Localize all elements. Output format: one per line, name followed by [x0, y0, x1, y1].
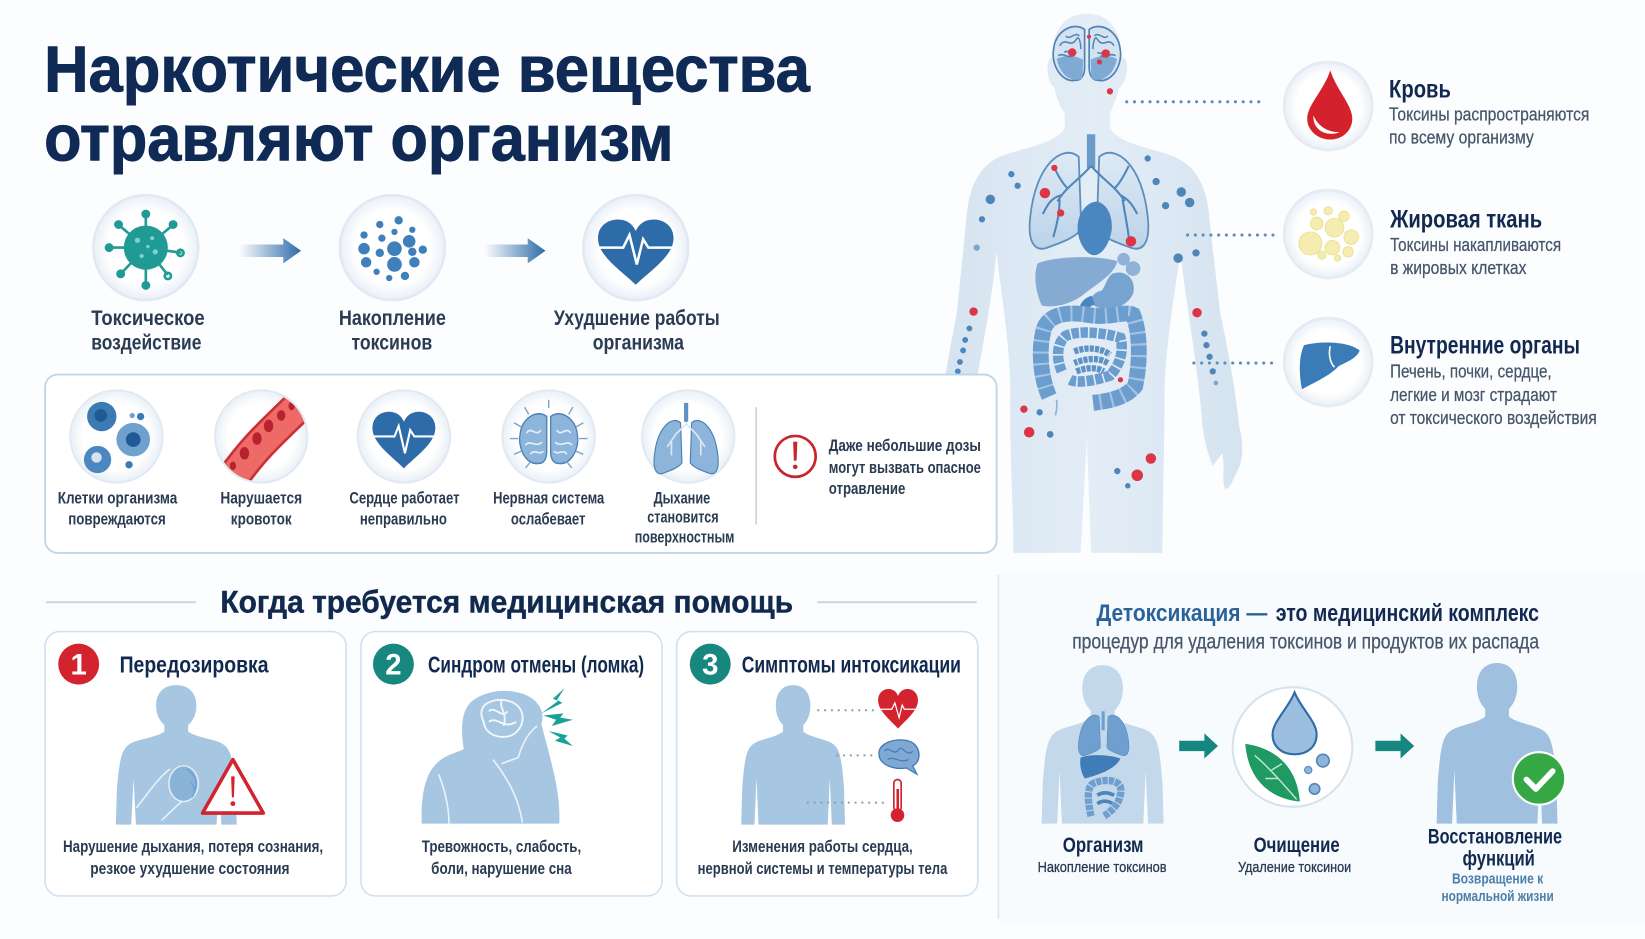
brain outline — [481, 700, 523, 737]
label: Клетки организма — [58, 490, 178, 508]
item: blood flow — [215, 390, 307, 529]
warning text: Даже небольшие дозы — [829, 437, 981, 455]
description: от токсического воздействия — [1390, 408, 1597, 429]
card text: резкое ухудшение состояния — [90, 859, 290, 878]
step note: Удаление токсинои — [1238, 859, 1351, 876]
card text: нервной системы и температуры тела — [698, 859, 948, 878]
label: Дыхание — [654, 490, 710, 508]
step: recovery — [1428, 663, 1565, 905]
label: Нарушается — [220, 490, 302, 508]
label: Токсическое — [91, 307, 205, 330]
label: Нервная система — [493, 490, 605, 508]
arrow — [485, 238, 546, 263]
step: cleansing — [1233, 687, 1352, 876]
arrow — [239, 238, 301, 263]
section heading: medical help: Когда требуется медицинская помощь — [220, 585, 793, 620]
icon: heart with pulse — [583, 195, 688, 300]
icon: heart — [878, 689, 918, 729]
heading: Жировая ткань — [1389, 206, 1542, 234]
card text: Тревожность, слабость, — [422, 837, 581, 856]
badge 3: 3 — [702, 649, 718, 682]
icon: brain — [879, 740, 919, 774]
forearm and fist — [136, 766, 198, 820]
description: Печень, почки, сердце, — [1390, 362, 1552, 383]
badge 1: 1 — [71, 649, 87, 682]
badge 3 — [690, 644, 731, 685]
illustration: healthy body — [1437, 663, 1558, 824]
body silhouette — [939, 14, 1242, 553]
label: кровоток — [231, 511, 292, 529]
icon: thermometer — [891, 780, 904, 822]
description: по всему организму — [1389, 128, 1534, 149]
card text: боли, нарушение сна — [431, 859, 572, 878]
label: повреждаются — [68, 511, 166, 529]
lungs — [1030, 134, 1148, 249]
illustration: man with headache — [422, 688, 573, 824]
step note: нормальной жизни — [1441, 889, 1554, 905]
illustration: man holding chest — [116, 685, 263, 825]
detox subheading: процедур для удаления токсинов и продуктов их распада — [1072, 630, 1539, 653]
label: Ухудшение работы — [554, 307, 720, 330]
warning callout — [775, 436, 981, 498]
badge 2 — [373, 644, 414, 685]
description: в жировых клетках — [1390, 258, 1527, 279]
label: становится — [647, 508, 719, 526]
liver organ — [1035, 257, 1117, 306]
heading: Внутренние органы — [1390, 332, 1580, 360]
human body diagram — [939, 14, 1242, 553]
label: Сердце работает — [349, 490, 460, 508]
panel frame — [45, 375, 997, 553]
title: Наркотические вещества — [44, 32, 811, 105]
badge 1 — [58, 644, 99, 685]
toxin dots: blue — [955, 155, 1218, 488]
icon: liver — [1284, 318, 1372, 406]
arrow — [1179, 733, 1218, 759]
label: токсинов — [351, 331, 432, 354]
title: отравляют организм — [44, 102, 674, 175]
card text: Нарушение дыхания, потеря сознания, — [63, 837, 323, 856]
process flow — [91, 195, 720, 354]
panel: effects on body — [45, 375, 997, 553]
icon: exclamation circle — [775, 436, 816, 477]
detox heading: это медицинский комплекс — [1276, 600, 1539, 627]
toxin dots: red — [969, 35, 1202, 481]
icon: blood drop — [1284, 62, 1372, 150]
icon: check mark — [1513, 752, 1565, 805]
step note: Возвращение к — [1452, 871, 1544, 887]
card heading: Передозировка — [120, 652, 269, 678]
step 1: toxic exposure — [91, 195, 205, 354]
icon: pain bolts — [541, 688, 573, 746]
icon: lungs — [642, 390, 734, 483]
arrow — [1375, 733, 1414, 759]
label: Накопление — [339, 307, 446, 330]
step label: функций — [1462, 848, 1535, 871]
step label: Очищение — [1254, 834, 1340, 857]
warning text: могут вызвать опасное — [829, 459, 981, 477]
duodenum — [1084, 300, 1093, 313]
icon: virus — [93, 195, 198, 300]
detox panel background — [1000, 573, 1645, 924]
item: heart — [349, 390, 460, 529]
item: damaged cells — [58, 390, 178, 529]
icon: fat cells — [1284, 190, 1372, 278]
illustration: body and symptoms — [741, 685, 919, 825]
illustration: body with organs — [1042, 665, 1164, 824]
step label: Восстановление — [1428, 826, 1562, 849]
connector lines to organ callouts — [1127, 102, 1278, 363]
callout: fat tissue — [1284, 190, 1561, 279]
large and small intestine — [1041, 313, 1139, 415]
detox heading: Детоксикация — — [1096, 600, 1268, 627]
icon: heart — [358, 390, 450, 483]
label: неправильно — [360, 511, 447, 529]
icon: toxin particles — [340, 195, 445, 300]
icon: drop and leaf — [1233, 687, 1352, 807]
panel: detox — [1038, 600, 1565, 905]
step 2: accumulation — [339, 195, 446, 354]
item: breathing — [635, 390, 734, 546]
callout: internal organs — [1284, 318, 1597, 429]
label: воздействие — [91, 331, 201, 354]
badge 2: 2 — [385, 649, 402, 682]
card frame — [361, 632, 662, 896]
icon: brain with rays — [503, 390, 595, 483]
card frame — [677, 632, 978, 896]
step 3: organ decline — [554, 195, 720, 354]
description: Токсины распространяются — [1389, 105, 1589, 126]
heart organ — [1078, 201, 1112, 255]
step label: Организм — [1063, 834, 1144, 857]
label: организма — [593, 331, 684, 354]
label: поверхностным — [635, 528, 734, 546]
step note: Накопление токсинов — [1038, 859, 1167, 876]
icon: warning triangle — [202, 760, 263, 813]
card frame — [45, 632, 346, 896]
icon: cells — [70, 390, 163, 483]
callout: blood — [1284, 62, 1589, 150]
card heading: Синдром отмены (ломка) — [428, 652, 644, 678]
card text: Изменения работы сердца, — [732, 837, 913, 856]
step: organism — [1038, 665, 1167, 876]
card 1: overdose — [45, 632, 346, 896]
brain — [1053, 27, 1121, 81]
stomach organ — [1091, 272, 1134, 309]
heading: Кровь — [1389, 76, 1451, 104]
label: ослабевает — [511, 511, 585, 529]
card 2: withdrawal — [361, 632, 662, 896]
icon: blood vessel — [215, 390, 307, 483]
card heading: Симптомы интоксикации — [742, 652, 961, 678]
description: Токсины накапливаются — [1390, 235, 1561, 256]
item: nervous system — [493, 390, 605, 529]
divider — [755, 407, 757, 525]
description: легкие и мозг страдают — [1390, 385, 1557, 406]
warning text: отравление — [829, 480, 905, 498]
card 3: intoxication symptoms — [677, 632, 978, 896]
vertical divider — [998, 575, 999, 919]
